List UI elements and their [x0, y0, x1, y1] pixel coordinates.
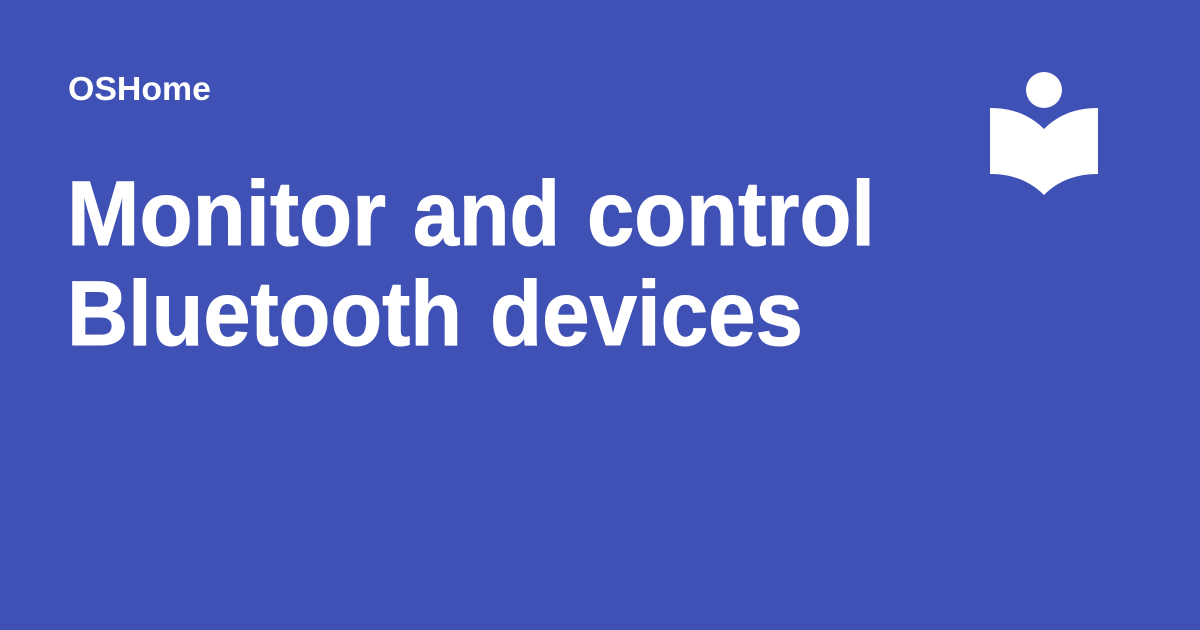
title line 1: control [587, 163, 875, 265]
icon: reader with open book [990, 72, 1098, 195]
site name: OSHome [68, 70, 211, 107]
title line 2: Bluetooth [67, 263, 462, 365]
title line 1: and [413, 163, 560, 265]
title line 1: Monitor [67, 163, 386, 265]
title line 2: devices [490, 263, 803, 365]
title [67, 163, 875, 365]
